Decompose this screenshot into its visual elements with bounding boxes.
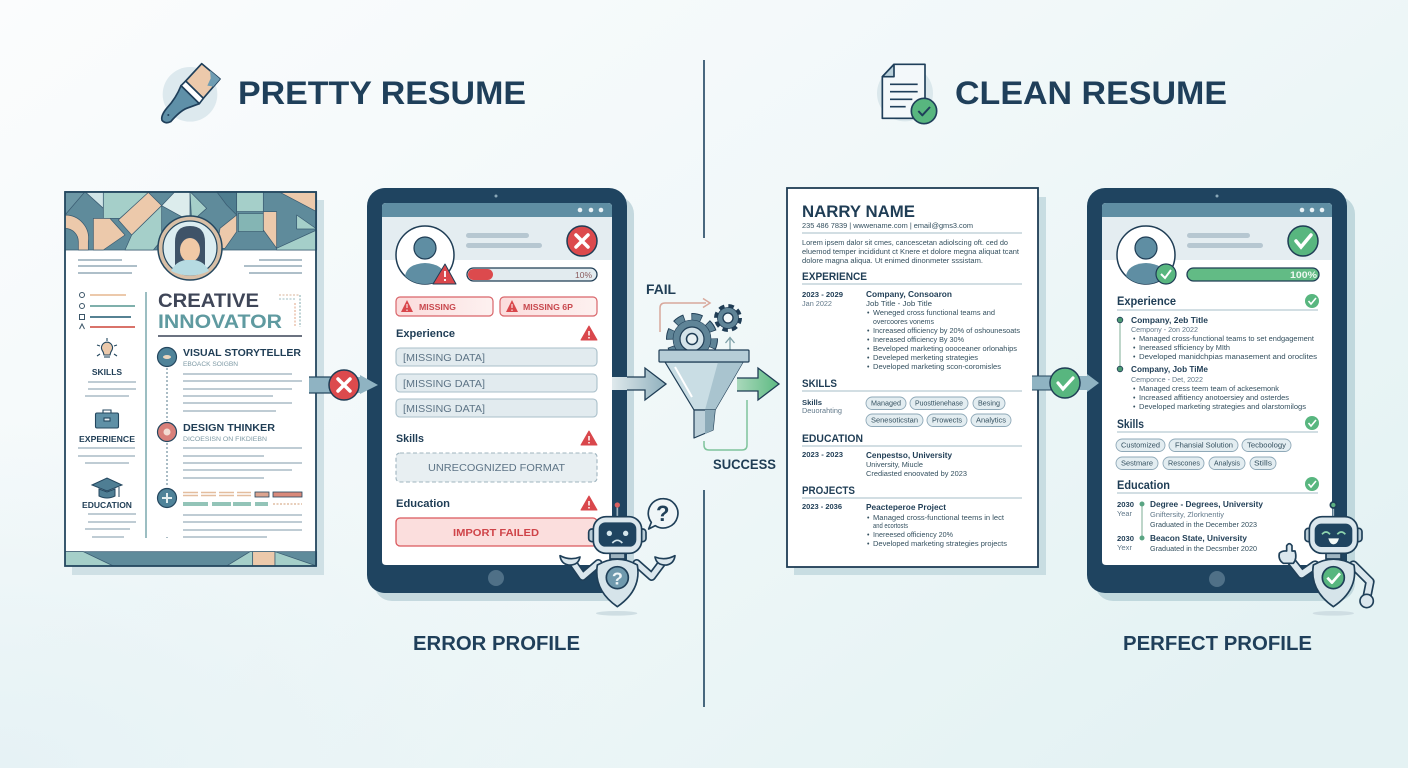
resume header: 235 486 7839 | wwwename.com | email@gms3.com	[802, 223, 973, 230]
section: experience: Developed manidchpias manasement and oroclites	[1139, 354, 1318, 361]
progress bar 10%: 10%	[575, 270, 592, 280]
section: skills: Analytics	[976, 418, 1007, 424]
section: experience: [MISSING DATA]	[403, 352, 485, 364]
name: creative innovator: INNOVATOR	[158, 312, 282, 333]
arrow: fail route	[660, 298, 710, 332]
section: experience: •	[1133, 336, 1136, 343]
section: skills: Analysis	[1214, 460, 1240, 468]
timeline item: design thinker: DESIGN THINKER	[183, 423, 276, 434]
section: skills: Sestmare	[1121, 460, 1153, 468]
section: experience: Inereased sfficiency by MIth	[1139, 345, 1230, 352]
icon: graduation cap	[92, 478, 122, 498]
speech bubble: question: ?	[656, 501, 669, 526]
section: experience: Develeped merketing strategies	[873, 355, 979, 362]
label: success: SUCCESS	[713, 457, 776, 472]
section: projects: Developed marketing strategies projects	[873, 541, 1008, 548]
section: experience: Increased affitiency anotoersiey and osterdes	[1139, 395, 1290, 402]
small up arrow	[726, 338, 734, 350]
resume summary	[802, 240, 1019, 265]
section: experience: Job Title - Job Title	[866, 301, 932, 308]
section: skills: Fhansial Solution	[1175, 442, 1233, 450]
progress bar 100%: 100%	[1290, 270, 1317, 280]
sidebar contact rows	[80, 292, 135, 329]
avatar portrait	[158, 216, 222, 280]
section: skills: Managed	[871, 400, 901, 408]
section: experience: Beveloped marketing oooceaner orlonahips	[873, 346, 1018, 353]
arrow: resume to error profile with red x	[309, 370, 378, 400]
icon: light bulb	[97, 338, 117, 357]
timeline item: skill bars	[158, 488, 302, 537]
badge: missing 6p	[500, 297, 597, 316]
section: experience: Developed marketing strategies and olarstomilogs	[1139, 404, 1307, 411]
icon: success check	[1288, 226, 1318, 256]
name: creative innovator	[158, 291, 302, 336]
label: skills: SKILLS	[92, 367, 122, 377]
name placeholder lines	[1187, 233, 1263, 248]
section: projects: •	[867, 515, 870, 522]
big gear	[670, 318, 714, 360]
timeline item: design thinker	[158, 422, 302, 478]
section: education: Crediasted enoovated by 2023	[866, 471, 967, 478]
section: education: Cenpestso, University	[866, 450, 952, 460]
section: projects: •	[867, 532, 870, 539]
arrow: resume to perfect profile with green check	[1032, 368, 1099, 398]
section: experience	[396, 326, 597, 417]
label: fail: FAIL	[646, 282, 676, 297]
section: experience	[1117, 294, 1319, 411]
section: experience: Jan 2022	[802, 301, 832, 308]
section: experience: •	[867, 328, 870, 335]
section: experience: Cemponce - Det, 2022	[1131, 377, 1203, 384]
heading: clean resume	[877, 64, 1227, 124]
section: projects: and ecortosts	[873, 523, 908, 530]
label: error profile: ERROR PROFILE	[413, 633, 580, 655]
section: education: Education	[396, 498, 450, 510]
icon: paint brush	[162, 64, 220, 123]
arrow: success route	[704, 400, 747, 450]
header contact lines	[78, 260, 302, 273]
robot arms	[560, 556, 675, 577]
section: experience	[802, 271, 1022, 371]
section: skills: Skills	[1117, 419, 1144, 431]
section: experience: Managed cross-functional teams to set endgagement	[1139, 336, 1314, 343]
section: skills	[396, 431, 597, 482]
section: education: IMPORT FAILED	[453, 527, 539, 539]
section: education: EDUCATION	[802, 433, 863, 445]
section: experience: EXPERIENCE	[802, 271, 867, 283]
section: education: Yexr	[1117, 545, 1133, 552]
section: education: Education	[1117, 480, 1170, 492]
section: skills: Deuorahting	[802, 408, 842, 415]
timeline item: visual storyteller	[158, 348, 302, 411]
section: experience: •	[1133, 395, 1136, 402]
footer banner	[65, 552, 317, 566]
funnel body	[659, 350, 749, 438]
browser title bar	[1102, 203, 1332, 217]
section: projects: •	[867, 541, 870, 548]
skills text lines	[85, 382, 136, 396]
divider line top	[703, 60, 705, 238]
resume summary: Lorem ipsem dalor sit cmes, cancescetan adiolscing oft. ced do	[802, 240, 1008, 247]
section: experience: •	[867, 337, 870, 344]
label: education: EDUCATION	[82, 500, 132, 510]
title text: clean resume: CLEAN RESUME	[955, 75, 1227, 111]
section: experience: overcoores vonems	[873, 319, 934, 326]
small gear	[717, 307, 739, 329]
section: experience: •	[867, 355, 870, 362]
progress bar 10%	[467, 268, 597, 281]
experience text lines	[78, 448, 135, 463]
robot: confused: ?	[612, 568, 623, 588]
section: education	[802, 433, 1022, 478]
robot arms	[1279, 544, 1373, 608]
arrow: into funnel	[612, 368, 666, 400]
sidebar divider	[145, 292, 147, 538]
icon: document with check	[877, 64, 937, 124]
section: education: 2023 - 2023	[802, 450, 843, 459]
section: skills: Tecboology	[1247, 442, 1287, 450]
section: projects: PROJECTS	[802, 485, 855, 497]
panel: error profile tablet	[367, 188, 634, 601]
section: experience: •	[1133, 386, 1136, 393]
section: education: Graduated in the Decsmber 2020	[1150, 546, 1257, 553]
section: education: Gniftersity, Zlorknentiy	[1150, 512, 1225, 519]
section: education	[1117, 477, 1319, 553]
name: creative innovator: CREATIVE	[158, 291, 259, 312]
badge: missing	[396, 297, 493, 316]
timeline item: visual storyteller: VISUAL STORYTELLER	[183, 348, 302, 359]
section: experience: [MISSING DATA]	[403, 378, 485, 390]
section: skills: UNRECOGNIZED FORMAT	[428, 462, 566, 474]
section: skills: Prowects	[932, 418, 963, 424]
section: experience: Experience	[1117, 296, 1176, 308]
section: skills: Stills	[1254, 460, 1273, 468]
section: experience: •	[1133, 354, 1136, 361]
panel: perfect profile tablet	[1087, 188, 1355, 601]
section: experience: Increased officiency by 20% of oshounesoats	[873, 328, 1021, 335]
section: projects: Peacteperoe Project	[866, 502, 946, 512]
section: experience: •	[867, 310, 870, 317]
browser title bar	[382, 203, 612, 217]
section: education	[396, 496, 597, 546]
section: skills: Besing	[978, 400, 1000, 408]
resume summary: eluemod temper incididunt ct Knere et dolore megna aliquat tcant	[802, 249, 1019, 256]
section: experience: Company, Consoaron	[866, 289, 952, 299]
section: projects: Inereesed officiency 20%	[873, 532, 953, 539]
section: skills: Skills	[802, 400, 822, 407]
section: skills: Skills	[396, 433, 424, 445]
home button	[488, 570, 504, 586]
arrow: success output	[737, 368, 779, 400]
section: education: Degree - Degrees, University	[1150, 499, 1263, 509]
section: education: University, Miucle	[866, 462, 923, 469]
section: experience: •	[1133, 345, 1136, 352]
badge: missing: MISSING	[419, 302, 456, 312]
section: experience: [MISSING DATA]	[403, 403, 485, 415]
icon: briefcase	[96, 410, 118, 428]
robot: happy	[1279, 502, 1373, 616]
section: skills: SKILLS	[802, 378, 837, 390]
section: experience: •	[867, 346, 870, 353]
heading: pretty resume	[162, 64, 526, 123]
divider line bottom	[703, 490, 705, 707]
section: skills: Customized	[1121, 442, 1160, 450]
section: experience: Experience	[396, 328, 455, 340]
panel: clean resume document	[787, 188, 1046, 575]
education text lines	[85, 514, 136, 537]
timeline item: visual storyteller: EBOACK SOIGBN	[183, 361, 238, 368]
panel: pretty resume document	[65, 192, 324, 575]
timeline item: design thinker: DICOESISN ON FIKDIEBN	[183, 436, 267, 443]
label: perfect profile: PERFECT PROFILE	[1123, 633, 1312, 655]
title text: pretty resume: PRETTY RESUME	[238, 75, 526, 111]
robot: confused	[560, 499, 678, 616]
name placeholder lines	[466, 233, 542, 248]
section: experience: 2023 - 2029	[802, 290, 843, 299]
avatar with warning	[396, 226, 456, 284]
section: experience: Company, Job TiMe	[1131, 364, 1208, 374]
section: skills	[1116, 416, 1319, 470]
resume header	[802, 202, 1022, 233]
section: experience: Developed marketing scon-coromisles	[873, 364, 1002, 371]
section: skills: Rescones	[1168, 460, 1201, 468]
label: experience: EXPERIENCE	[79, 434, 135, 444]
home button	[1209, 571, 1225, 587]
section: skills: Senesoticstan	[871, 418, 918, 424]
resume header: NARRY NAME	[802, 202, 915, 221]
section: skills	[802, 378, 1022, 426]
section: skills: Puosttienehase	[915, 400, 963, 408]
section: experience: •	[1133, 404, 1136, 411]
section: education: Beacon State, University	[1150, 533, 1247, 543]
section: education: 2030	[1117, 534, 1134, 543]
section: education: Year	[1117, 511, 1133, 518]
section: education: 2030	[1117, 500, 1134, 509]
section: experience: Weneged cross functional teams and	[873, 310, 995, 317]
geometric header banner	[65, 192, 317, 250]
section: education: Graduated in the December 2023	[1150, 522, 1257, 529]
badge: missing 6p: MISSING 6P	[523, 302, 573, 312]
resume summary: dolore magna aliqua. Ut enimed dinonmeter sssistam.	[802, 258, 983, 265]
section: experience: Inereased officiency By 30%	[873, 337, 964, 344]
funnel and gears	[646, 282, 779, 472]
timeline connector	[166, 368, 168, 538]
section: projects	[802, 485, 1022, 548]
progress bar 100%	[1187, 268, 1319, 281]
section: experience: Managed cress teem team of ackesemonk	[1139, 386, 1280, 393]
section: experience: Company, 2eb Title	[1131, 315, 1208, 325]
icon: failure x	[567, 226, 597, 256]
section: experience: Cempony - 2on 2022	[1131, 327, 1198, 334]
section: projects: 2023 - 2036	[802, 502, 842, 511]
avatar with check	[1117, 226, 1176, 284]
section: projects: Managed cross-functional teems in lect	[873, 515, 1004, 522]
section: experience: •	[867, 364, 870, 371]
